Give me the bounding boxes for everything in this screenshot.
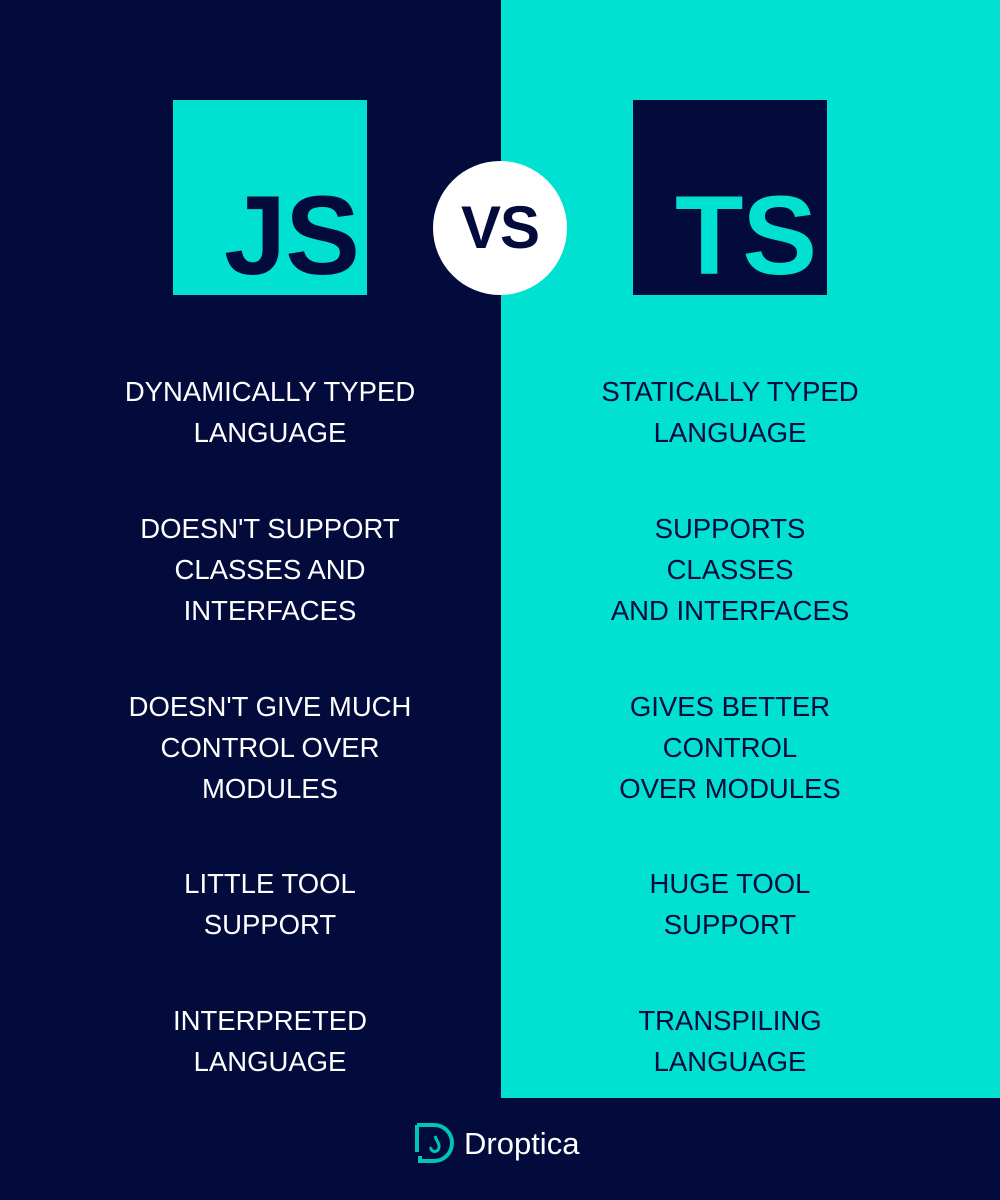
text: TS classes: AND INTERFACES	[611, 595, 849, 626]
text: TS transpiling: TRANSPILING	[638, 1005, 822, 1036]
text: JS modules: CONTROL OVER	[160, 732, 380, 763]
icon: TS logo: TS	[675, 173, 816, 298]
text: TS classes: SUPPORTS	[655, 513, 805, 544]
text: Droptica: Droptica	[464, 1126, 579, 1161]
text: TS transpiling: LANGUAGE	[654, 1046, 806, 1077]
text: TS statically typed: STATICALLY TYPED	[601, 376, 859, 407]
text: JS dynamically typed	[125, 376, 415, 448]
icon: VS circle	[433, 161, 567, 295]
text: JS interpreted: INTERPRETED	[173, 1005, 367, 1036]
text: TS tool support: HUGE TOOL	[650, 868, 810, 899]
text: JS modules	[129, 691, 411, 804]
text: TS tool support: SUPPORT	[664, 909, 796, 940]
icon: droptica mark	[415, 1123, 454, 1163]
text: TS classes: CLASSES	[667, 554, 793, 585]
text: JS classes: INTERFACES	[184, 595, 356, 626]
logo: Droptica	[415, 1123, 580, 1163]
text: TS modules	[619, 691, 841, 804]
text: TS modules: GIVES BETTER	[630, 691, 830, 722]
text: JS classes	[140, 513, 400, 626]
text: TS statically typed: LANGUAGE	[654, 417, 806, 448]
text: TS modules: CONTROL	[663, 732, 797, 763]
icon: TS logo	[633, 100, 827, 295]
text: JS tool support	[184, 868, 356, 940]
text: JS classes: CLASSES AND	[174, 554, 366, 585]
text: TS transpiling	[638, 1005, 822, 1077]
text: JS tool support: LITTLE TOOL	[184, 868, 356, 899]
text: TS tool support	[650, 868, 810, 940]
text: TS classes	[611, 513, 849, 626]
panel: typescript background	[501, 0, 1000, 1098]
text: JS modules: MODULES	[202, 773, 338, 804]
text: JS tool support: SUPPORT	[204, 909, 336, 940]
text: TS statically typed	[601, 376, 859, 448]
text: JS modules: DOESN'T GIVE MUCH	[129, 691, 411, 722]
icon: VS circle: VS	[461, 194, 539, 261]
text: JS interpreted	[173, 1005, 367, 1077]
text: TS modules: OVER MODULES	[619, 773, 841, 804]
text: JS dynamically typed: LANGUAGE	[194, 417, 346, 448]
text: JS classes: DOESN'T SUPPORT	[140, 513, 400, 544]
text: JS interpreted: LANGUAGE	[194, 1046, 346, 1077]
icon: JS logo: JS	[224, 173, 359, 298]
text: JS dynamically typed: DYNAMICALLY TYPED	[125, 376, 415, 407]
icon: JS logo	[173, 100, 367, 295]
